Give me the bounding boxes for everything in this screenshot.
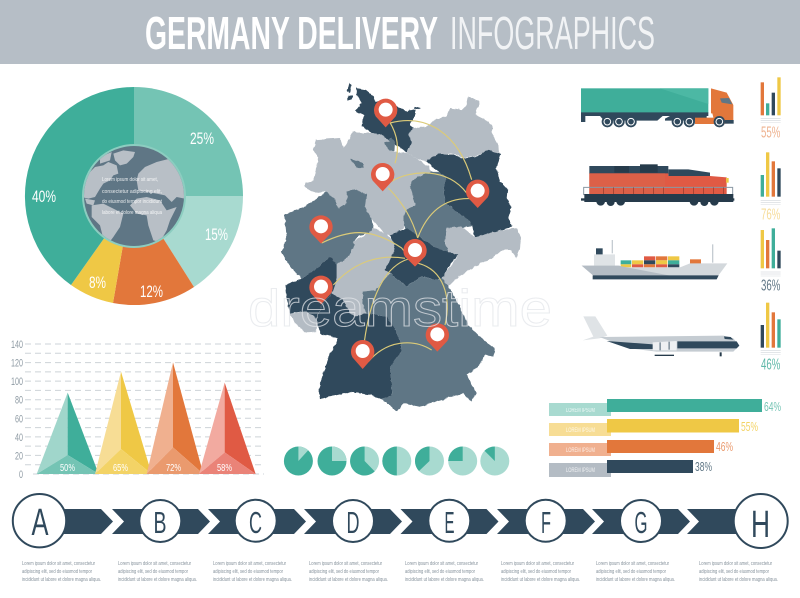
transport panel: truck and train — [581, 88, 734, 206]
horizontal bar chart: LOREM IPSUM — [566, 428, 595, 434]
axis labels: 20 — [15, 450, 23, 462]
step captions — [22, 561, 778, 583]
axis labels: 0 — [19, 469, 23, 481]
horizontal bar chart: LOREM IPSUM — [566, 408, 595, 414]
small pie row — [284, 446, 509, 476]
pyramid percentages: 50% — [60, 463, 75, 474]
step captions: adipiscing elit, sed do eiusmod tempor — [118, 569, 188, 575]
step captions: incididunt ut labore et dolore magna aliqua. — [596, 577, 675, 583]
mini chart: train 76% — [761, 152, 781, 223]
axis labels: 140 — [11, 339, 23, 351]
step captions: incididunt ut labore et dolore magna aliqua. — [22, 577, 101, 583]
mini chart: ship 36%: 36% — [761, 278, 780, 295]
pyramids — [37, 362, 256, 474]
horizontal bar chart — [549, 399, 781, 477]
donut percentages: 8% — [89, 273, 106, 292]
step letters: B — [154, 505, 166, 540]
mini bar charts: ship and plane — [761, 228, 781, 374]
step captions: Lorem ipsum dolor sit amet, consectetur — [501, 561, 574, 567]
mini chart: plane 46% — [761, 303, 781, 374]
step captions: Lorem ipsum dolor sit amet, consectetur — [699, 561, 772, 567]
title banner — [0, 0, 800, 64]
step letters: C — [249, 505, 262, 540]
horizontal bar chart: 64% — [764, 399, 781, 414]
wheels — [596, 197, 719, 206]
donut percentages: 15% — [205, 225, 228, 244]
triangle chart — [11, 339, 264, 481]
axis labels: 120 — [11, 358, 23, 370]
map regions — [282, 82, 521, 412]
axis labels — [11, 339, 23, 481]
horizontal bar chart: LOREM IPSUM — [566, 448, 595, 454]
donut percentages: 40% — [32, 187, 56, 206]
chevron arrows — [50, 509, 750, 534]
mini chart: truck 55% — [761, 77, 781, 142]
axis labels: 40 — [15, 432, 23, 444]
step captions: incididunt ut labore et dolore magna aliqua. — [405, 577, 484, 583]
icon: globe — [82, 144, 186, 248]
step captions: Lorem ipsum dolor sit amet, consectetur — [213, 561, 286, 567]
title banner: GERMANY DELIVERY — [145, 7, 438, 59]
title banner: INFOGRAPHICS — [450, 7, 655, 59]
donut percentages — [32, 129, 228, 301]
circles — [13, 494, 788, 548]
step captions: adipiscing elit, sed do eiusmod tempor — [405, 569, 475, 575]
globe caption: labore et dolore magna aliqua — [102, 210, 162, 216]
mini chart: train 76%: 76% — [761, 206, 780, 223]
horizontal bar chart: LOREM IPSUM — [566, 468, 595, 474]
step letters: A — [32, 502, 49, 544]
step captions: adipiscing elit, sed do eiusmod tempor — [501, 569, 571, 575]
globe caption — [102, 177, 163, 216]
location pins — [309, 99, 489, 369]
step letters: D — [346, 505, 360, 540]
donut chart with globe — [25, 87, 243, 305]
step captions: Lorem ipsum dolor sit amet, consectetur — [596, 561, 669, 567]
icon: locomotive — [581, 164, 734, 206]
transport panel: ship and plane — [582, 240, 739, 356]
horizontal bar chart: 38% — [695, 459, 712, 474]
step captions: Lorem ipsum dolor sit amet, consectetur — [309, 561, 382, 567]
horizontal bar chart: 55% — [741, 419, 758, 434]
step captions: incididunt ut labore et dolore magna aliqua. — [309, 577, 388, 583]
step captions: adipiscing elit, sed do eiusmod tempor — [699, 569, 769, 575]
globe caption: Lorem ipsum dolor sit amet, — [102, 177, 158, 183]
pyramid percentages: 65% — [113, 463, 128, 474]
step letters: H — [751, 504, 770, 546]
step captions: adipiscing elit, sed do eiusmod tempor — [309, 569, 379, 575]
step captions: incididunt ut labore et dolore magna aliqua. — [213, 577, 292, 583]
donut percentages: 25% — [190, 129, 214, 148]
pyramid percentages — [60, 463, 232, 474]
icon: truck — [581, 88, 734, 127]
step letters — [32, 502, 770, 546]
map of Germany — [282, 82, 521, 412]
donut percentages: 12% — [140, 282, 163, 301]
icon: container ship — [582, 240, 727, 279]
mini chart: plane 46%: 46% — [761, 357, 780, 374]
step captions: adipiscing elit, sed do eiusmod tempor — [213, 569, 283, 575]
step letters: G — [634, 505, 648, 540]
delivery routes — [322, 121, 472, 362]
pyramid percentages: 58% — [217, 463, 232, 474]
step letters: E — [444, 505, 454, 540]
timeline A to H — [13, 494, 788, 583]
step captions: adipiscing elit, sed do eiusmod tempor — [596, 569, 666, 575]
globe caption: consectetur adipiscing elit, — [102, 189, 162, 195]
mini chart: truck 55%: 55% — [761, 125, 780, 142]
axis labels: 80 — [15, 395, 23, 407]
step captions: incididunt ut labore et dolore magna aliqua. — [699, 577, 778, 583]
mini bar charts: truck and train — [761, 77, 781, 223]
step captions: adipiscing elit, sed do eiusmod tempor — [22, 569, 92, 575]
step captions: incididunt ut labore et dolore magna aliqua. — [118, 577, 197, 583]
wheels — [602, 116, 725, 127]
step letters: F — [541, 505, 551, 540]
icon: cargo plane — [583, 316, 739, 356]
axis labels: 100 — [11, 376, 23, 388]
step captions: Lorem ipsum dolor sit amet, consectetur — [22, 561, 95, 567]
step captions: incididunt ut labore et dolore magna aliqua. — [501, 577, 580, 583]
axis labels: 60 — [15, 413, 23, 425]
horizontal bar chart: 46% — [716, 439, 733, 454]
mini chart: ship 36% — [761, 228, 781, 295]
pyramid percentages: 72% — [166, 463, 181, 474]
watermark: dreamstime — [248, 280, 552, 338]
globe caption: do eiusmod tempor incididunt — [102, 199, 163, 205]
step captions: Lorem ipsum dolor sit amet, consectetur — [405, 561, 478, 567]
step captions: Lorem ipsum dolor sit amet, consectetur — [118, 561, 191, 567]
